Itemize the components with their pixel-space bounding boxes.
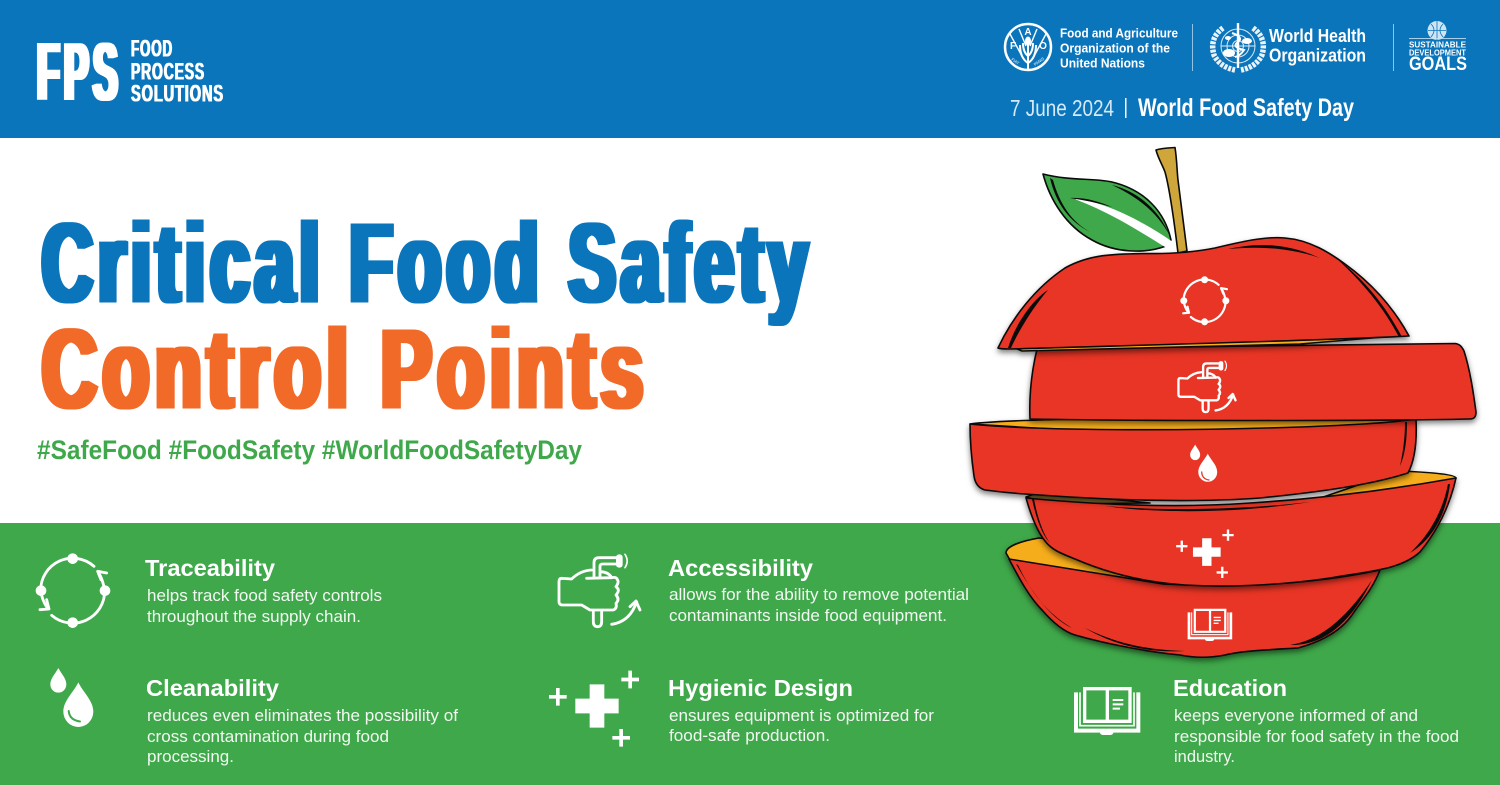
cleanability text: cross contamination during food <box>147 728 389 746</box>
accessibility text: Accessibility <box>668 555 813 581</box>
FAO emblem: O <box>1039 41 1047 52</box>
FAO emblem: PANIS <box>1033 56 1045 67</box>
icon: water drops <box>50 668 93 727</box>
accessibility text: allows for the ability to remove potential <box>669 586 969 604</box>
traceability text: helps track food safety controls <box>147 587 382 605</box>
accessibility text: contaminants inside food equipment. <box>669 607 947 625</box>
traceability text <box>145 555 382 626</box>
FPS logo: SOLUTIONS <box>131 80 224 108</box>
WHO logo <box>1213 23 1366 70</box>
Sustainable Development Goals logo: SUSTAINABLE <box>1409 40 1466 50</box>
title: Control Points <box>42 306 649 432</box>
FPS logo: FOOD <box>131 36 173 62</box>
divider <box>1393 24 1394 71</box>
event date line <box>1010 94 1354 122</box>
FAO name: Organization of the <box>1060 40 1170 56</box>
header band <box>0 0 1500 138</box>
FAO emblem: F <box>1010 41 1016 52</box>
FAO name: Food and Agriculture <box>1060 26 1178 40</box>
apple icons <box>1176 276 1236 641</box>
cleanability text <box>146 675 458 766</box>
hygienic design text: Hygienic Design <box>668 675 853 701</box>
apple stem <box>1156 148 1187 253</box>
apple illustration <box>970 148 1476 657</box>
icon: open book <box>1076 689 1138 735</box>
item: education <box>1076 675 1459 766</box>
green footer band <box>0 523 1500 785</box>
WHO name: Organization <box>1269 44 1366 66</box>
education text: keeps everyone informed of and <box>1174 707 1418 725</box>
hygienic design text: ensures equipment is optimized for <box>669 707 935 725</box>
FAO name <box>1060 26 1178 70</box>
FAO emblem: A <box>1024 27 1032 38</box>
Sustainable Development Goals logo: GOALS <box>1409 54 1467 75</box>
title: Critical Food Safety <box>42 200 813 326</box>
divider <box>1192 24 1193 71</box>
item: accessibility <box>559 554 969 627</box>
apple icon: education <box>1189 610 1231 641</box>
accessibility text <box>668 555 969 625</box>
education text: industry. <box>1174 748 1235 766</box>
FAO name: United Nations <box>1060 56 1145 70</box>
item: traceability <box>36 553 382 628</box>
traceability text: Traceability <box>145 555 275 581</box>
slice 4 <box>1026 471 1456 586</box>
slice 1: top <box>998 238 1409 351</box>
hashtags: #SafeFood #FoodSafety #WorldFoodSafetyDay <box>37 435 582 465</box>
item: cleanability <box>50 668 458 766</box>
apple icon: traceability <box>1180 276 1229 325</box>
FPS logo: PROCESS <box>131 58 205 86</box>
slice 3 <box>970 418 1416 501</box>
slice 2 <box>1030 344 1476 420</box>
hygienic design text <box>668 675 935 745</box>
education text <box>1173 675 1459 766</box>
FPS logo: FPS <box>37 25 122 118</box>
Sustainable Development Goals logo <box>1409 21 1467 75</box>
event date line: 7 June 2024 <box>1010 95 1114 121</box>
cleanability text: reduces even eliminates the possibility of <box>147 707 458 725</box>
cleanability text: Cleanability <box>146 675 279 701</box>
FAO emblem: FIAT <box>1010 57 1021 66</box>
WHO name: World Health <box>1269 25 1366 46</box>
icon: traceability cycle <box>36 553 110 628</box>
FAO logo <box>1005 24 1178 70</box>
WHO emblem <box>1213 23 1263 70</box>
traceability text: throughout the supply chain. <box>147 608 361 626</box>
icon: hand on valve <box>559 554 640 627</box>
hygienic design text: food-safe production. <box>669 727 830 745</box>
title <box>42 200 813 432</box>
education text: Education <box>1173 675 1287 701</box>
WHO name <box>1269 25 1366 66</box>
Sustainable Development Goals logo: DEVELOPMENT <box>1409 48 1467 58</box>
education text: responsible for food safety in the food <box>1174 728 1459 746</box>
apple icon: hygienic design <box>1176 529 1234 578</box>
apple icon: accessibility <box>1178 361 1236 412</box>
FAO emblem <box>1005 24 1051 70</box>
slice 5: bottom <box>1006 538 1380 657</box>
icon: plus signs <box>549 671 639 747</box>
event date line: World Food Safety Day <box>1138 94 1354 122</box>
apple icon: cleanability <box>1190 445 1217 482</box>
apple leaf <box>1043 174 1172 251</box>
cleanability text: processing. <box>147 748 234 766</box>
item: hygienic design <box>549 671 935 747</box>
